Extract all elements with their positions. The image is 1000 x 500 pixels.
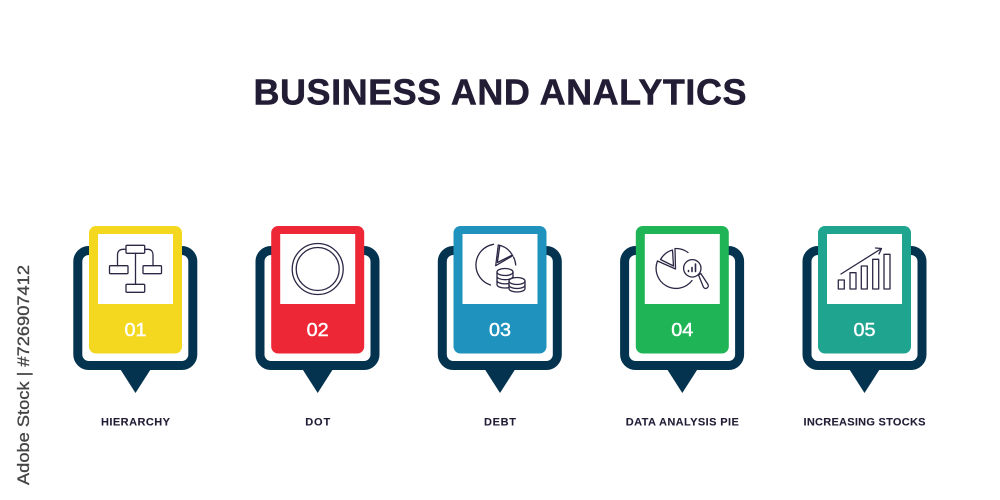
- card: [271, 226, 364, 354]
- number: 04: [671, 319, 693, 340]
- label: INCREASING STOCKS: [804, 416, 926, 428]
- pin frame: [260, 250, 375, 393]
- pin frame: [625, 250, 740, 393]
- label: DATA ANALYSIS PIE: [626, 416, 739, 428]
- icon: rising bars with arrow: [838, 248, 890, 289]
- panel: hierarchy: [78, 226, 193, 428]
- card: [818, 226, 911, 354]
- card: [636, 226, 729, 354]
- label: HIERARCHY: [101, 416, 171, 428]
- label: DOT: [305, 416, 330, 428]
- pin frame: [442, 250, 557, 393]
- card: [89, 226, 182, 354]
- title: BUSINESS AND ANALYTICS: [254, 71, 746, 112]
- stock credit: Adobe Stock | #726907412: [14, 265, 33, 485]
- white icon area: [827, 234, 902, 304]
- number: 02: [307, 319, 329, 340]
- icon: dot: [292, 244, 343, 294]
- pin frame: [78, 250, 193, 393]
- white icon area: [645, 234, 720, 304]
- white icon area: [462, 234, 538, 304]
- panel: debt: [442, 226, 557, 428]
- white icon area: [98, 234, 173, 304]
- card: [454, 226, 546, 354]
- panel: data analysis pie: [625, 226, 740, 428]
- label: DEBT: [484, 416, 516, 428]
- number: 05: [854, 319, 876, 340]
- pin frame: [807, 250, 922, 393]
- panel: increasing stocks: [804, 226, 926, 428]
- white icon area: [280, 234, 355, 304]
- number: 01: [124, 319, 146, 340]
- icon: pie with coins: [476, 244, 525, 292]
- icon: pie with magnifier: [656, 248, 708, 288]
- icon: hierarchy: [110, 245, 162, 292]
- number: 03: [489, 319, 511, 340]
- panel: dot: [260, 226, 375, 428]
